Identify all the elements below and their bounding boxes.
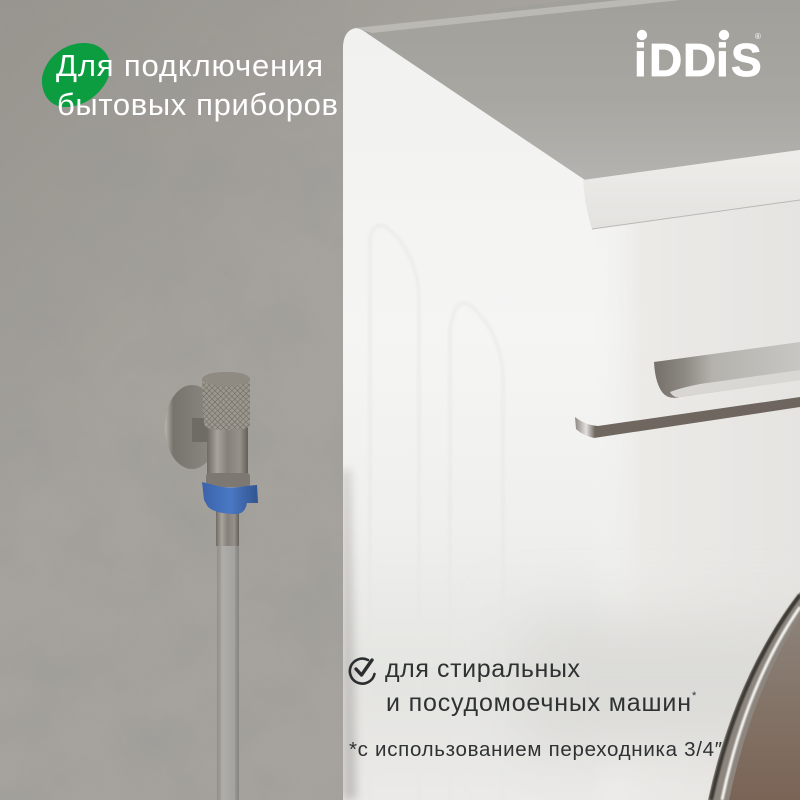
machine front lip: [583, 150, 800, 229]
footnote: *с использованием переходника 3/4″: [349, 738, 722, 761]
heading: [56, 48, 338, 122]
handle recess: [654, 342, 800, 398]
angle valve: [165, 372, 258, 800]
machine top surface: [352, 0, 800, 181]
valve lower tube: [216, 510, 239, 546]
lip seam: [592, 200, 800, 229]
round door: [708, 592, 800, 800]
valve wall flange: [165, 385, 219, 469]
door dark outer edge: [711, 595, 800, 800]
blue nut: [202, 482, 258, 514]
valve threaded ring: [206, 473, 250, 487]
machine top back rim: [356, 0, 680, 33]
recess lower lip: [670, 370, 800, 397]
washing machine: [343, 0, 800, 800]
brand logo: ®: [755, 32, 761, 41]
door outer ring: [708, 592, 800, 800]
knurled knob: [202, 372, 250, 430]
valve hose: [217, 540, 239, 800]
machine front panel: [590, 199, 800, 800]
valve body: [207, 425, 248, 477]
machine side panel: [343, 28, 800, 800]
lower panel shading: [343, 470, 800, 800]
feature text: *: [692, 690, 697, 702]
feature text: и посудомоечных машин: [386, 689, 691, 717]
embossed side arches: [370, 225, 503, 800]
heading: бытовых приборов: [57, 87, 338, 122]
knob top cap: [202, 372, 250, 386]
icon: check mark in circle: [350, 659, 374, 684]
door glass: [729, 617, 800, 800]
valve neck: [192, 418, 212, 442]
brand logo: iDDiS: [634, 34, 762, 86]
green accent blob: [42, 43, 110, 107]
chrome strip: [575, 397, 800, 438]
door highlight: [722, 607, 800, 800]
shaded edge at machine corner: [343, 470, 356, 800]
heading: Для подключения: [56, 48, 323, 83]
feature text: [385, 655, 697, 717]
feature text: для стиральных: [385, 655, 580, 683]
